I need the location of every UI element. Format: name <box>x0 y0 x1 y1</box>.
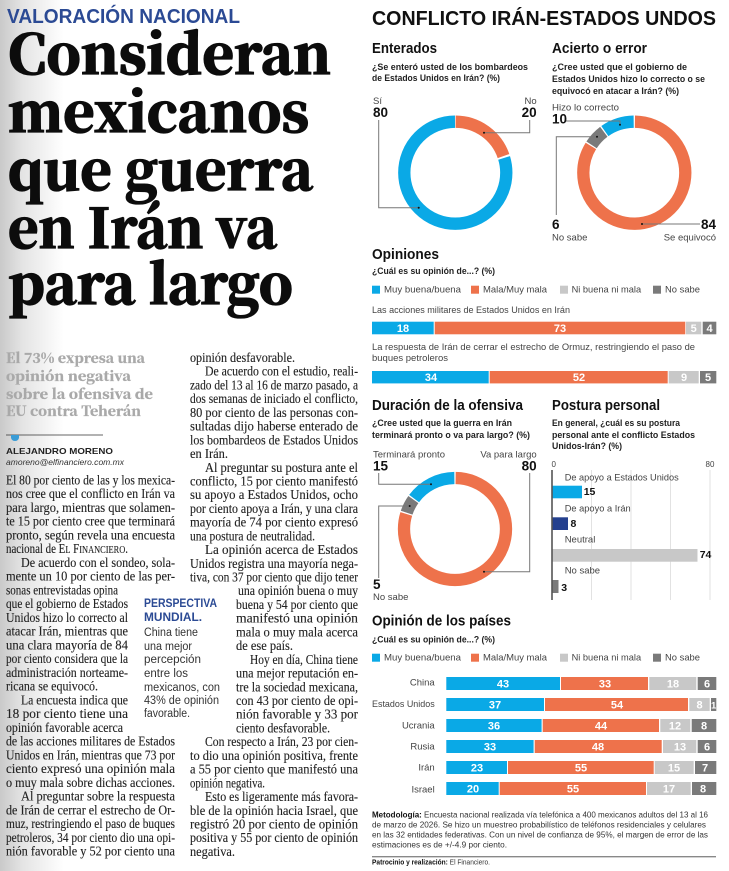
article column 1: El 80 por ciento de las y los mexica- <box>6 472 175 488</box>
methodology note: estimaciones es de +/-4.9 por ciento. <box>372 840 507 850</box>
panel: Duración de la ofensiva <box>372 398 537 603</box>
bar chart: postura: 3 <box>561 582 567 594</box>
panel: Duración de la ofensiva: No sabe <box>373 592 408 603</box>
callout: Perspectiva mundial: percepción <box>144 654 201 666</box>
article column 1: o muy mala sobre dichas acciones. <box>6 775 175 790</box>
byline <box>6 435 125 467</box>
panel: Opiniones: ¿Cuál es su opinión de...? (%) <box>372 266 495 277</box>
article column 2 <box>190 350 358 859</box>
article column 2: manifestó una opinión <box>236 611 358 626</box>
article column 2: La opinión acerca de Estados <box>205 542 358 557</box>
article column 1: ciento expresó una opinión mala <box>6 761 175 776</box>
stacked bars: countries: 55 <box>567 784 579 796</box>
stacked bar: estrecho de Ormuz: 52 <box>573 372 585 384</box>
stacked bar: acciones militares: 73 <box>554 323 566 335</box>
legend <box>372 653 700 664</box>
panel: Opiniones: Opiniones <box>372 247 439 263</box>
callout: Perspectiva mundial: entre los <box>144 668 188 680</box>
panel: Opinión de los países: ¿Cuál es su opinión de...? (%) <box>372 635 495 646</box>
stacked bar: estrecho de Ormuz: 9 <box>681 372 687 384</box>
article column 2: registró 20 por ciento de opinión <box>190 816 358 832</box>
article column 1: sonas entrevistadas opina <box>6 582 118 598</box>
panel: Duración de la ofensiva: 5 <box>373 577 381 592</box>
stacked bars: countries: China <box>410 678 435 689</box>
panel: Acierto o error: 84 <box>701 217 716 232</box>
article column 2: negativa. <box>190 844 235 859</box>
article column 2: tiva, con 37 por ciento que dijo tener <box>190 570 358 584</box>
legend <box>372 285 700 296</box>
article column 2: Hoy en día, China tiene <box>250 652 358 667</box>
methodology note: en las 32 entidades federativas. Con un nivel de confianza de 95%, el margen de error de las <box>372 830 709 840</box>
panel: Acierto o error: Hizo lo correcto <box>552 103 619 114</box>
stacked bars: countries: 44 <box>595 720 608 732</box>
article column 2: Unidos registra una mayoría nega- <box>190 556 358 571</box>
panel: Postura personal: personal ante el conflicto Estados <box>552 430 695 441</box>
stacked bars: countries: Israel <box>411 784 435 795</box>
article column 2: opinión negativa. <box>190 775 265 790</box>
callout: Perspectiva mundial: favorable. <box>144 708 190 720</box>
bar chart: postura: 80 <box>706 460 715 469</box>
article column 2: a 55 por ciento que manifestó una <box>190 762 358 777</box>
stacked bars: countries: 54 <box>611 700 624 712</box>
panel: Enterados: Enterados <box>372 41 437 57</box>
stacked bars: countries: Irán <box>418 763 435 774</box>
stacked bars: countries: 13 <box>674 742 686 754</box>
stacked bars: countries: 33 <box>484 742 496 754</box>
panel: Duración de la ofensiva: terminará pronto o va para largo? (%) <box>372 430 530 441</box>
bar chart: postura: 0 <box>551 460 556 469</box>
bar chart: postura: De apoyo a Estados Unidos <box>565 473 679 484</box>
callout: Perspectiva mundial <box>144 598 220 720</box>
legend: Mala/Muy mala <box>483 653 548 664</box>
headline: Consideran <box>8 13 331 90</box>
article column 1: petroleros, 34 por ciento dio una opi- <box>6 830 175 845</box>
article column 1: pronto, según revela una encuesta <box>6 528 175 542</box>
callout: Perspectiva mundial: una mejor <box>144 641 192 653</box>
stacked bar: acciones militares <box>372 322 716 335</box>
panel: Opinión de los países <box>372 614 717 796</box>
bar chart: postura: Neutral <box>565 535 595 546</box>
article column 2: tre la sociedad mexicana, <box>236 679 358 694</box>
article column 1: Unidos hizo lo correcto al <box>6 610 128 625</box>
stacked bars: countries: 20 <box>467 784 479 796</box>
callout: Perspectiva mundial: PERSPECTIVA <box>144 598 217 610</box>
stacked bars: countries: Rusia <box>410 742 435 753</box>
stacked bars: countries: Ucrania <box>402 721 435 732</box>
panel: Enterados: No <box>525 96 537 107</box>
article column 1: atacar Irán, mientras que <box>6 624 128 639</box>
panel: Opiniones: buques petroleros <box>372 353 448 364</box>
panel: Duración de la ofensiva: 80 <box>522 459 537 474</box>
subheading: sobre la ofensiva de <box>6 384 153 404</box>
callout: Perspectiva mundial: China tiene <box>144 627 198 639</box>
panel: Duración de la ofensiva: Duración de la ofensiva <box>372 398 524 414</box>
article column 2: de ese país. <box>236 638 293 653</box>
stacked bar: estrecho de Ormuz <box>372 371 716 384</box>
article column 1: nacional de EL FINANCIERO. <box>6 541 128 556</box>
panel: Postura personal: Unidos-Irán? (%) <box>552 441 622 452</box>
stacked bar: acciones militares: 4 <box>706 323 713 335</box>
stacked bars: countries: 6 <box>704 742 710 754</box>
legend: Ni buena ni mala <box>572 653 642 664</box>
article column 2: De acuerdo con el estudio, reali- <box>205 364 358 379</box>
stacked bars: countries: 8 <box>701 720 707 732</box>
panel: Acierto o error <box>552 41 716 244</box>
article column 2: mala o muy mala acerca <box>236 624 358 639</box>
bar chart: postura: De apoyo a Irán <box>565 504 631 515</box>
legend: Mala/Muy mala <box>483 285 548 296</box>
article column 1: De acuerdo con el sondeo, sola- <box>21 555 175 570</box>
article column 2: mayoría de 74 por ciento expresó <box>190 515 358 530</box>
article column 1: opinión favorable acerca <box>6 720 123 735</box>
panel: Duración de la ofensiva: Terminará pronto <box>373 450 445 461</box>
article column 1 <box>6 472 175 859</box>
article column 2: una mejor reputación en- <box>236 666 358 681</box>
panel: Acierto o error: 10 <box>552 112 567 126</box>
legend: No sabe <box>665 285 700 296</box>
subheading: EU contra Teherán <box>6 401 141 421</box>
headline: mexicanos <box>8 71 309 148</box>
panel: Enterados: Sí <box>373 96 382 107</box>
bar chart: postura: 15 <box>584 486 596 498</box>
headline: que guerra <box>8 129 314 206</box>
stacked bars: countries: 17 <box>663 784 675 796</box>
donut chart: enterados <box>404 122 506 224</box>
stacked bars: countries: 18 <box>667 678 679 690</box>
stacked bar: acciones militares: 5 <box>691 323 697 335</box>
stacked bars: countries: 1 <box>711 700 717 712</box>
article column 1: nos cree que el conflicto en Irán va <box>6 486 175 501</box>
methodology note: de marzo de 2026. Se hizo un muestreo probabilístico de teléfonos residenciales y celulares <box>372 820 707 830</box>
article column 2: en Irán. <box>190 446 228 461</box>
article column 1: mente un 10 por ciento de las per- <box>6 569 175 584</box>
stacked bars: countries: 55 <box>575 762 587 774</box>
panel: Acierto o error: ¿Cree usted que el gobierno de <box>552 62 687 73</box>
donut chart: acierto <box>583 122 685 224</box>
callout: Perspectiva mundial: mexicanos, con <box>144 682 220 694</box>
article column 1: de Irán de cerrar el estrecho de Or- <box>6 802 175 818</box>
stacked bar: acciones militares: 18 <box>397 323 409 335</box>
article column 2: los bombardeos de Estados Unidos <box>190 432 358 447</box>
article column 1: muz, restringiendo el paso de buques <box>6 816 175 831</box>
article column 2: Esto es ligeramente más favora- <box>205 789 358 804</box>
panel: Opiniones: Las acciones militares de Estados Unidos en Irán <box>372 305 570 316</box>
panel: Opiniones: La respuesta de Irán de cerrar el estrecho de Ormuz, restringiendo el paso de <box>372 342 695 353</box>
panel: Duración de la ofensiva: ¿Cree usted que la guerra en Irán <box>372 418 512 429</box>
article column 2: por ciento apoya a Irán, y una clara <box>190 501 358 516</box>
stacked bars: countries: 37 <box>489 700 501 712</box>
panel: Acierto o error: Se equivocó <box>664 233 716 244</box>
panel: Acierto o error: Acierto o error <box>552 41 647 57</box>
infographic title: CONFLICTO IRÁN-ESTADOS UNDOS <box>372 7 716 30</box>
article column 1: que el gobierno de Estados <box>6 596 128 611</box>
panel: Opinión de los países: Opinión de los países <box>372 614 511 630</box>
stacked bars: countries: 15 <box>668 762 680 774</box>
stacked bars: countries <box>372 677 717 796</box>
bar chart: postura: 8 <box>570 518 576 530</box>
article column 1: de las acciones militares de Estados <box>6 734 175 749</box>
article column 1: administración norteame- <box>6 665 128 680</box>
stacked bars: countries: Estados Unidos <box>372 699 435 710</box>
article column 2: to dio una opinión positiva, frente <box>190 748 358 763</box>
panel: Acierto o error: equivocó en atacar a Irán? (%) <box>552 86 679 97</box>
panel: Acierto o error: Estados Unidos hizo lo correcto o se <box>552 74 705 85</box>
panel: Enterados: 20 <box>522 105 537 120</box>
article column 1: te 15 por ciento cree que terminará <box>6 514 175 529</box>
bar chart: postura <box>551 460 715 600</box>
article column 2: Con respecto a Irán, 23 por cien- <box>205 734 358 749</box>
panel: Postura personal: En general, ¿cuál es su postura <box>552 418 681 429</box>
panel: Enterados: de Estados Unidos en Irán? (%) <box>372 73 500 84</box>
panel: Postura personal <box>551 398 715 600</box>
article column 1: para largo, mientras que solamen- <box>6 500 175 515</box>
callout: Perspectiva mundial: MUNDIAL. <box>144 612 202 624</box>
article column 2: su apoyo a Estados Unidos, ocho <box>190 487 358 502</box>
article column 1: nión favorable y 52 por ciento una <box>6 844 175 859</box>
legend: Muy buena/buena <box>384 653 462 664</box>
article column 2: conflicto, 15 por ciento manifestó <box>190 474 358 488</box>
article column 1: una clara mayoría de 84 <box>6 638 128 652</box>
headline <box>8 13 331 320</box>
article column 2: buena y 54 por ciento que <box>236 597 358 612</box>
stacked bars: countries: 48 <box>592 742 604 754</box>
bar chart: postura: No sabe <box>565 565 600 576</box>
stacked bars: countries: 8 <box>696 700 703 712</box>
article column 2: Al preguntar su postura ante el <box>205 460 358 475</box>
panel: Duración de la ofensiva: Va para largo <box>480 450 537 461</box>
panel: Opiniones <box>372 247 716 384</box>
stacked bars: countries: 12 <box>669 720 681 732</box>
article column 2: ble de la opinión hacia Israel, que <box>190 803 358 818</box>
byline: amoreno@elfinanciero.com.mx <box>6 458 125 467</box>
panel: Enterados: 80 <box>373 105 388 120</box>
stacked bars: countries: 23 <box>471 762 483 774</box>
stacked bar: estrecho de Ormuz: 34 <box>425 372 438 384</box>
legend: Ni buena ni mala <box>572 285 642 296</box>
headline: para largo <box>8 243 293 320</box>
legend: Muy buena/buena <box>384 285 462 296</box>
panel: Enterados: ¿Se enteró usted de los bombardeos <box>372 62 528 73</box>
subheading <box>6 348 153 421</box>
byline: ALEJANDRO MORENO <box>6 446 113 456</box>
stacked bars: countries: 36 <box>488 720 500 732</box>
stacked bars: countries: 6 <box>704 678 710 690</box>
methodology note <box>372 810 709 850</box>
panel: Acierto o error: 6 <box>552 217 560 232</box>
panel: Duración de la ofensiva: 15 <box>373 459 389 474</box>
donut chart: duración <box>404 478 506 580</box>
article column 2: 80 por ciento de las personas con- <box>190 405 358 420</box>
stacked bars: countries: 33 <box>599 678 611 690</box>
bar chart: postura: 74 <box>700 549 712 561</box>
panel: Postura personal: Postura personal <box>552 398 660 414</box>
stacked bars: countries: 43 <box>497 678 509 690</box>
subheading: El 73% expresa una <box>6 348 146 368</box>
stacked bars: countries: 8 <box>700 784 706 796</box>
article column 1: ricana se equivocó. <box>6 679 98 694</box>
subheading: opinión negativa <box>6 366 132 386</box>
article column 2: una opinión buena o muy <box>238 583 358 598</box>
article column 2: positiva y 55 por ciento de opinión <box>190 830 358 845</box>
article column 2: ciento desfavorable. <box>236 720 330 735</box>
panel: Enterados <box>372 41 537 224</box>
callout: Perspectiva mundial: 43% de opinión <box>144 695 219 707</box>
section label: Valoración Nacional: VALORACIÓN NACIONAL <box>7 4 240 28</box>
article column 2: nión favorable y 33 por <box>236 707 358 722</box>
article column 1: Unidos en Irán, mientras que 73 por <box>6 748 175 762</box>
credits: Patrocinio y realización: El Financiero. <box>372 858 490 867</box>
article column 1: Al preguntar sobre la respuesta <box>21 789 175 804</box>
article column 2: sultadas dijo haberse enterado de <box>190 419 358 434</box>
article column 2: zado del 13 al 16 de marzo pasado, a <box>190 377 358 392</box>
methodology note: Metodología: Encuesta nacional realizada vía telefónica a 400 mexicanos adultos del 13 al 16 <box>372 810 708 820</box>
stacked bar: estrecho de Ormuz: 5 <box>705 372 711 384</box>
article column 2: con 43 por ciento de opi- <box>236 693 358 708</box>
article column 2: opinión desfavorable. <box>190 350 295 365</box>
stacked bars: countries: 7 <box>702 762 708 774</box>
article column 1: 18 por ciento tiene una <box>6 706 128 721</box>
headline: en Irán va <box>8 187 278 264</box>
article column 1: La encuesta indica que <box>21 692 128 708</box>
article column 2: dos semanas de iniciado el conflicto, <box>190 391 358 406</box>
legend: No sabe <box>665 653 700 664</box>
article column 1: por ciento considera que la <box>6 651 128 666</box>
article column 2: una postura de neutralidad. <box>190 528 315 543</box>
panel: Acierto o error: No sabe <box>552 233 587 244</box>
